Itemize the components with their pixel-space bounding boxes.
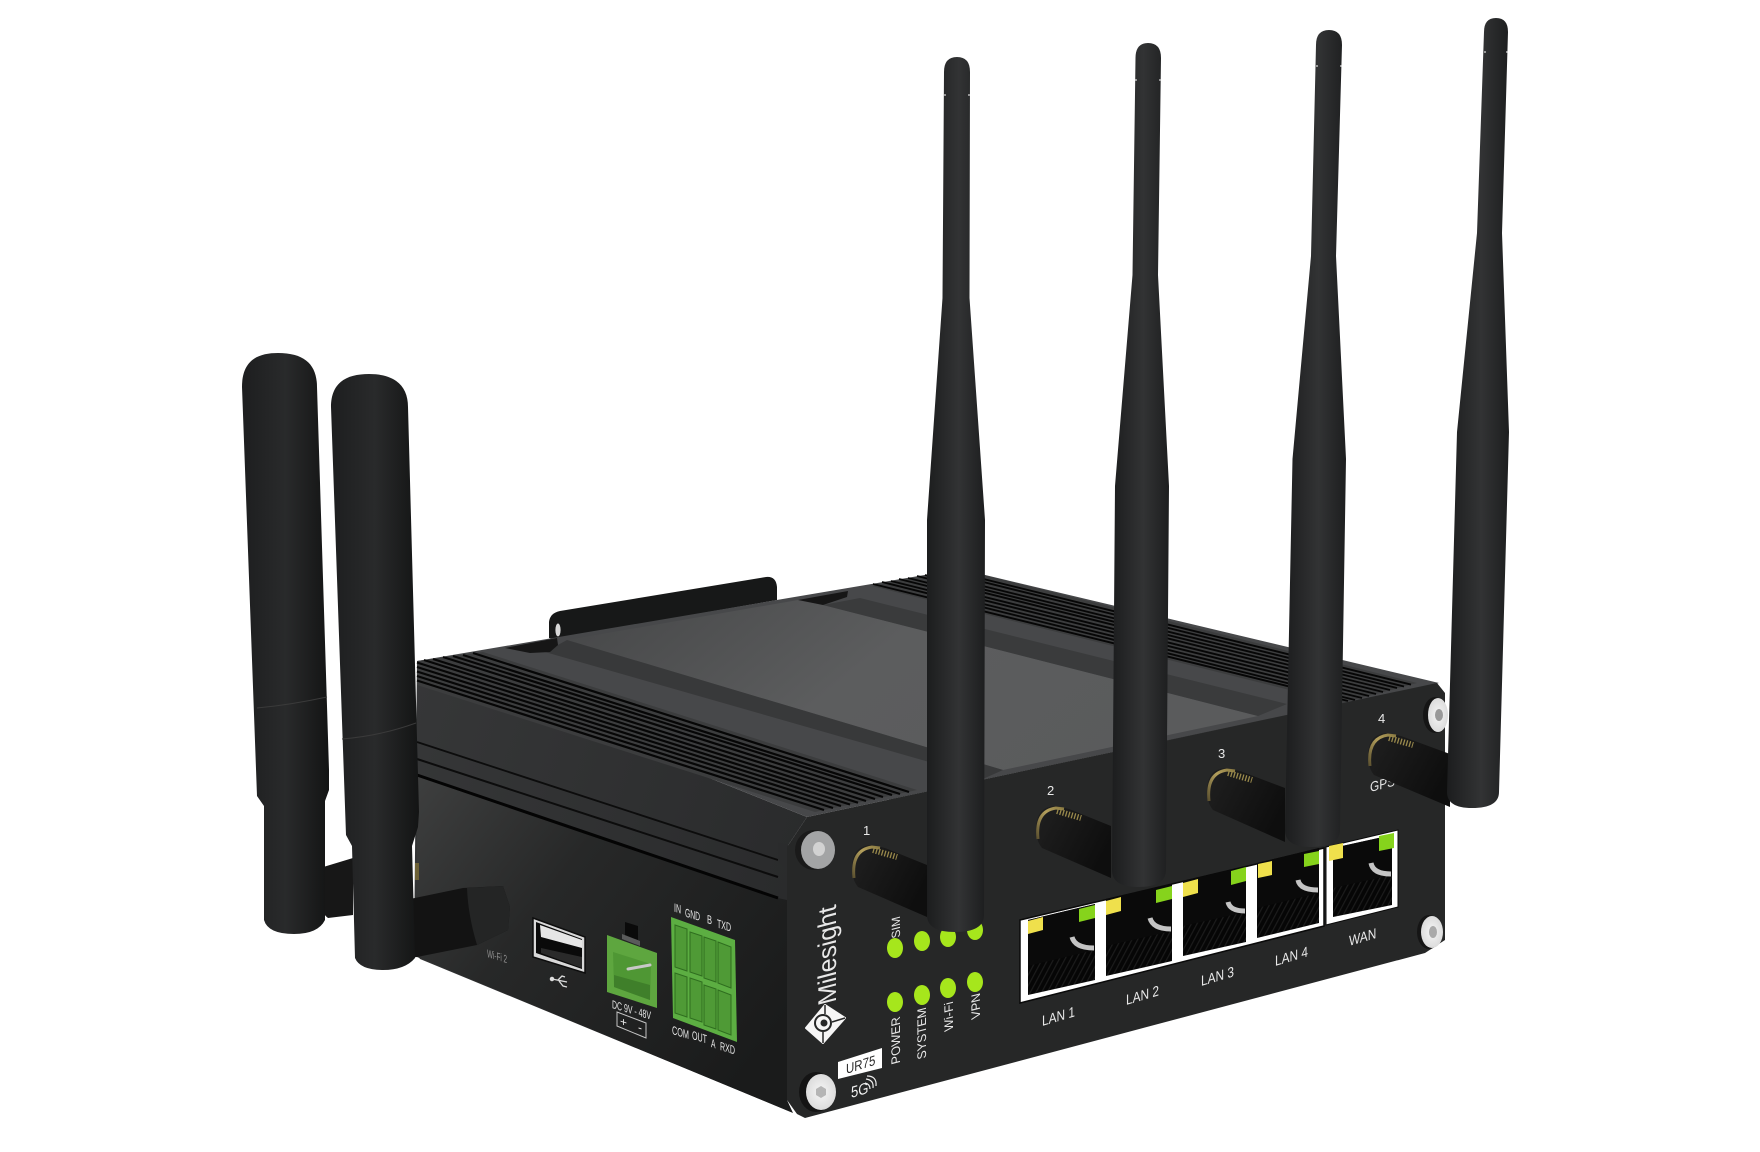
Milesight logo: [806, 1005, 845, 1043]
terminal labels: RXD: [720, 1039, 735, 1057]
antenna port numbers: 4: [1378, 711, 1385, 726]
port labels: WAN: [1349, 925, 1376, 949]
status LED labels: Wi-Fi: [942, 1000, 956, 1033]
port labels: LAN 1: [1042, 1003, 1075, 1029]
LAN ports block: [1020, 848, 1324, 1003]
status LEDs: [887, 920, 983, 1012]
DC input label: -: [638, 1020, 642, 1035]
port labels: [1042, 925, 1376, 1029]
antenna connector 4: [1368, 733, 1450, 807]
Wi-Fi 2 label: Wi-Fi 2: [487, 948, 507, 966]
Milesight wordmark: Milesight: [813, 902, 842, 1008]
terminal labels: [672, 901, 735, 1057]
port labels: LAN 3: [1201, 963, 1234, 989]
terminal labels: TXD: [717, 917, 731, 935]
status LED labels: VPN: [969, 992, 983, 1021]
antenna port numbers: 1: [863, 823, 870, 838]
terminal labels: B: [707, 912, 712, 927]
left side face: [414, 661, 807, 1113]
terminal labels: COM: [672, 1023, 689, 1042]
front face: [787, 683, 1445, 1118]
DC input label: +: [620, 1014, 627, 1030]
terminal block: [671, 917, 737, 1042]
front left stub antenna: [331, 374, 419, 970]
raised centre plate: [567, 600, 1258, 770]
DC input label: DC 9V - 48V: [612, 998, 651, 1023]
status LED labels: POWER: [889, 1015, 903, 1066]
UR75 model tag: UR75: [846, 1052, 875, 1077]
main antenna 3: [1285, 30, 1346, 847]
USB icon: [550, 976, 567, 987]
port labels: LAN 2: [1126, 982, 1159, 1008]
antenna port numbers: 2: [1047, 783, 1054, 798]
antenna connector 3: [1207, 768, 1285, 842]
status LED labels: SIM: [889, 915, 903, 940]
left cooling fins: [417, 652, 917, 812]
main antenna 1: [927, 57, 985, 932]
top surface: [417, 569, 1439, 817]
mounting rail handle: [549, 577, 777, 640]
antenna connector 1: [852, 845, 927, 917]
Wi-Fi 2 cable stub: [410, 863, 510, 958]
terminal labels: IN: [674, 901, 681, 917]
terminal labels: OUT: [692, 1028, 707, 1047]
main antenna 4: [1447, 18, 1509, 808]
terminal labels: A: [711, 1036, 716, 1051]
LAN LED indicators: [1028, 851, 1319, 934]
status LED labels: SYSTEM: [915, 1006, 929, 1061]
right cooling fins: [872, 569, 1417, 703]
plate grooves: [545, 598, 1287, 778]
LAN upper port shade: [1028, 848, 1319, 966]
main antenna 2: [1112, 43, 1169, 887]
plate notches: [505, 591, 848, 653]
DC power connector: [607, 922, 657, 1008]
5G mark: [851, 1076, 876, 1102]
antenna port numbers: GPS: [1370, 773, 1395, 795]
DC input label: [612, 998, 651, 1038]
antenna port numbers: 3: [1218, 746, 1225, 761]
screws: [795, 697, 1448, 1112]
5G mark: 5G: [851, 1080, 868, 1102]
WAN port: [1326, 830, 1398, 925]
antenna port numbers: [863, 711, 1395, 838]
status LED labels: [889, 915, 983, 1066]
terminal labels: GND: [685, 906, 700, 924]
LAN port clips: [1072, 880, 1318, 948]
antenna connector 2: [1036, 806, 1111, 878]
UR75 model tag: [838, 1048, 882, 1079]
port labels: LAN 4: [1275, 943, 1308, 969]
rear left stub antenna: [242, 353, 353, 934]
USB port: [533, 918, 585, 973]
terminal cells: [675, 925, 731, 1035]
